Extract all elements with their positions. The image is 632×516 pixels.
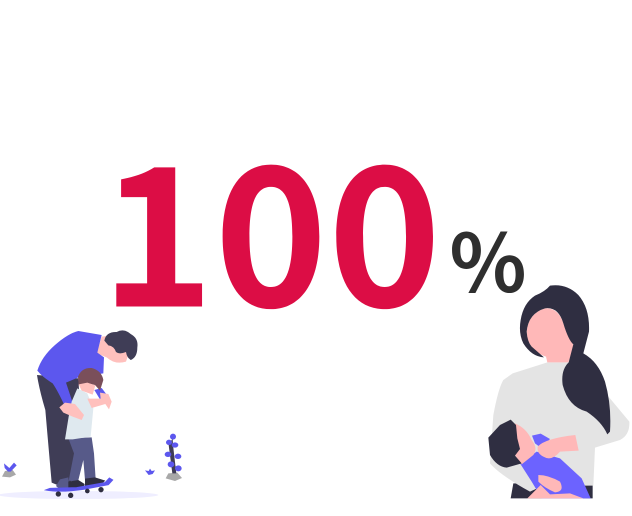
child face — [79, 383, 95, 395]
father far sleeve — [94, 388, 107, 399]
mother forearm — [538, 435, 579, 458]
father hair — [104, 330, 138, 360]
baby face — [513, 423, 535, 464]
percent sign: % — [450, 200, 526, 316]
baby hair — [488, 420, 522, 468]
mother neck and face — [527, 308, 574, 362]
baby leg — [538, 475, 562, 492]
small plant centre — [145, 469, 155, 475]
baby body — [520, 452, 591, 498]
illustration: father and child on skateboard — [0, 330, 182, 499]
mother hair — [520, 285, 610, 434]
child shoes — [68, 477, 105, 489]
plant right — [165, 434, 182, 481]
skateboard — [46, 478, 113, 491]
father trousers — [37, 375, 80, 485]
father sweater — [37, 331, 104, 408]
father neck and face — [97, 335, 130, 363]
plant left — [2, 463, 17, 477]
father shoe — [56, 477, 69, 489]
illustration: mother nursing baby — [488, 285, 629, 498]
child hair and head — [78, 368, 103, 391]
child arm — [87, 393, 112, 409]
ground shadow — [0, 491, 158, 499]
baby bottle sleeve — [532, 434, 550, 448]
child shirt — [65, 388, 93, 439]
father hand on child — [59, 403, 84, 420]
skateboard wheels — [56, 487, 104, 498]
child trousers — [68, 437, 96, 482]
mother trousers — [511, 483, 593, 498]
big number 100: 100 — [100, 82, 442, 362]
mother lower hand — [527, 485, 583, 498]
mother sweater — [490, 362, 629, 492]
